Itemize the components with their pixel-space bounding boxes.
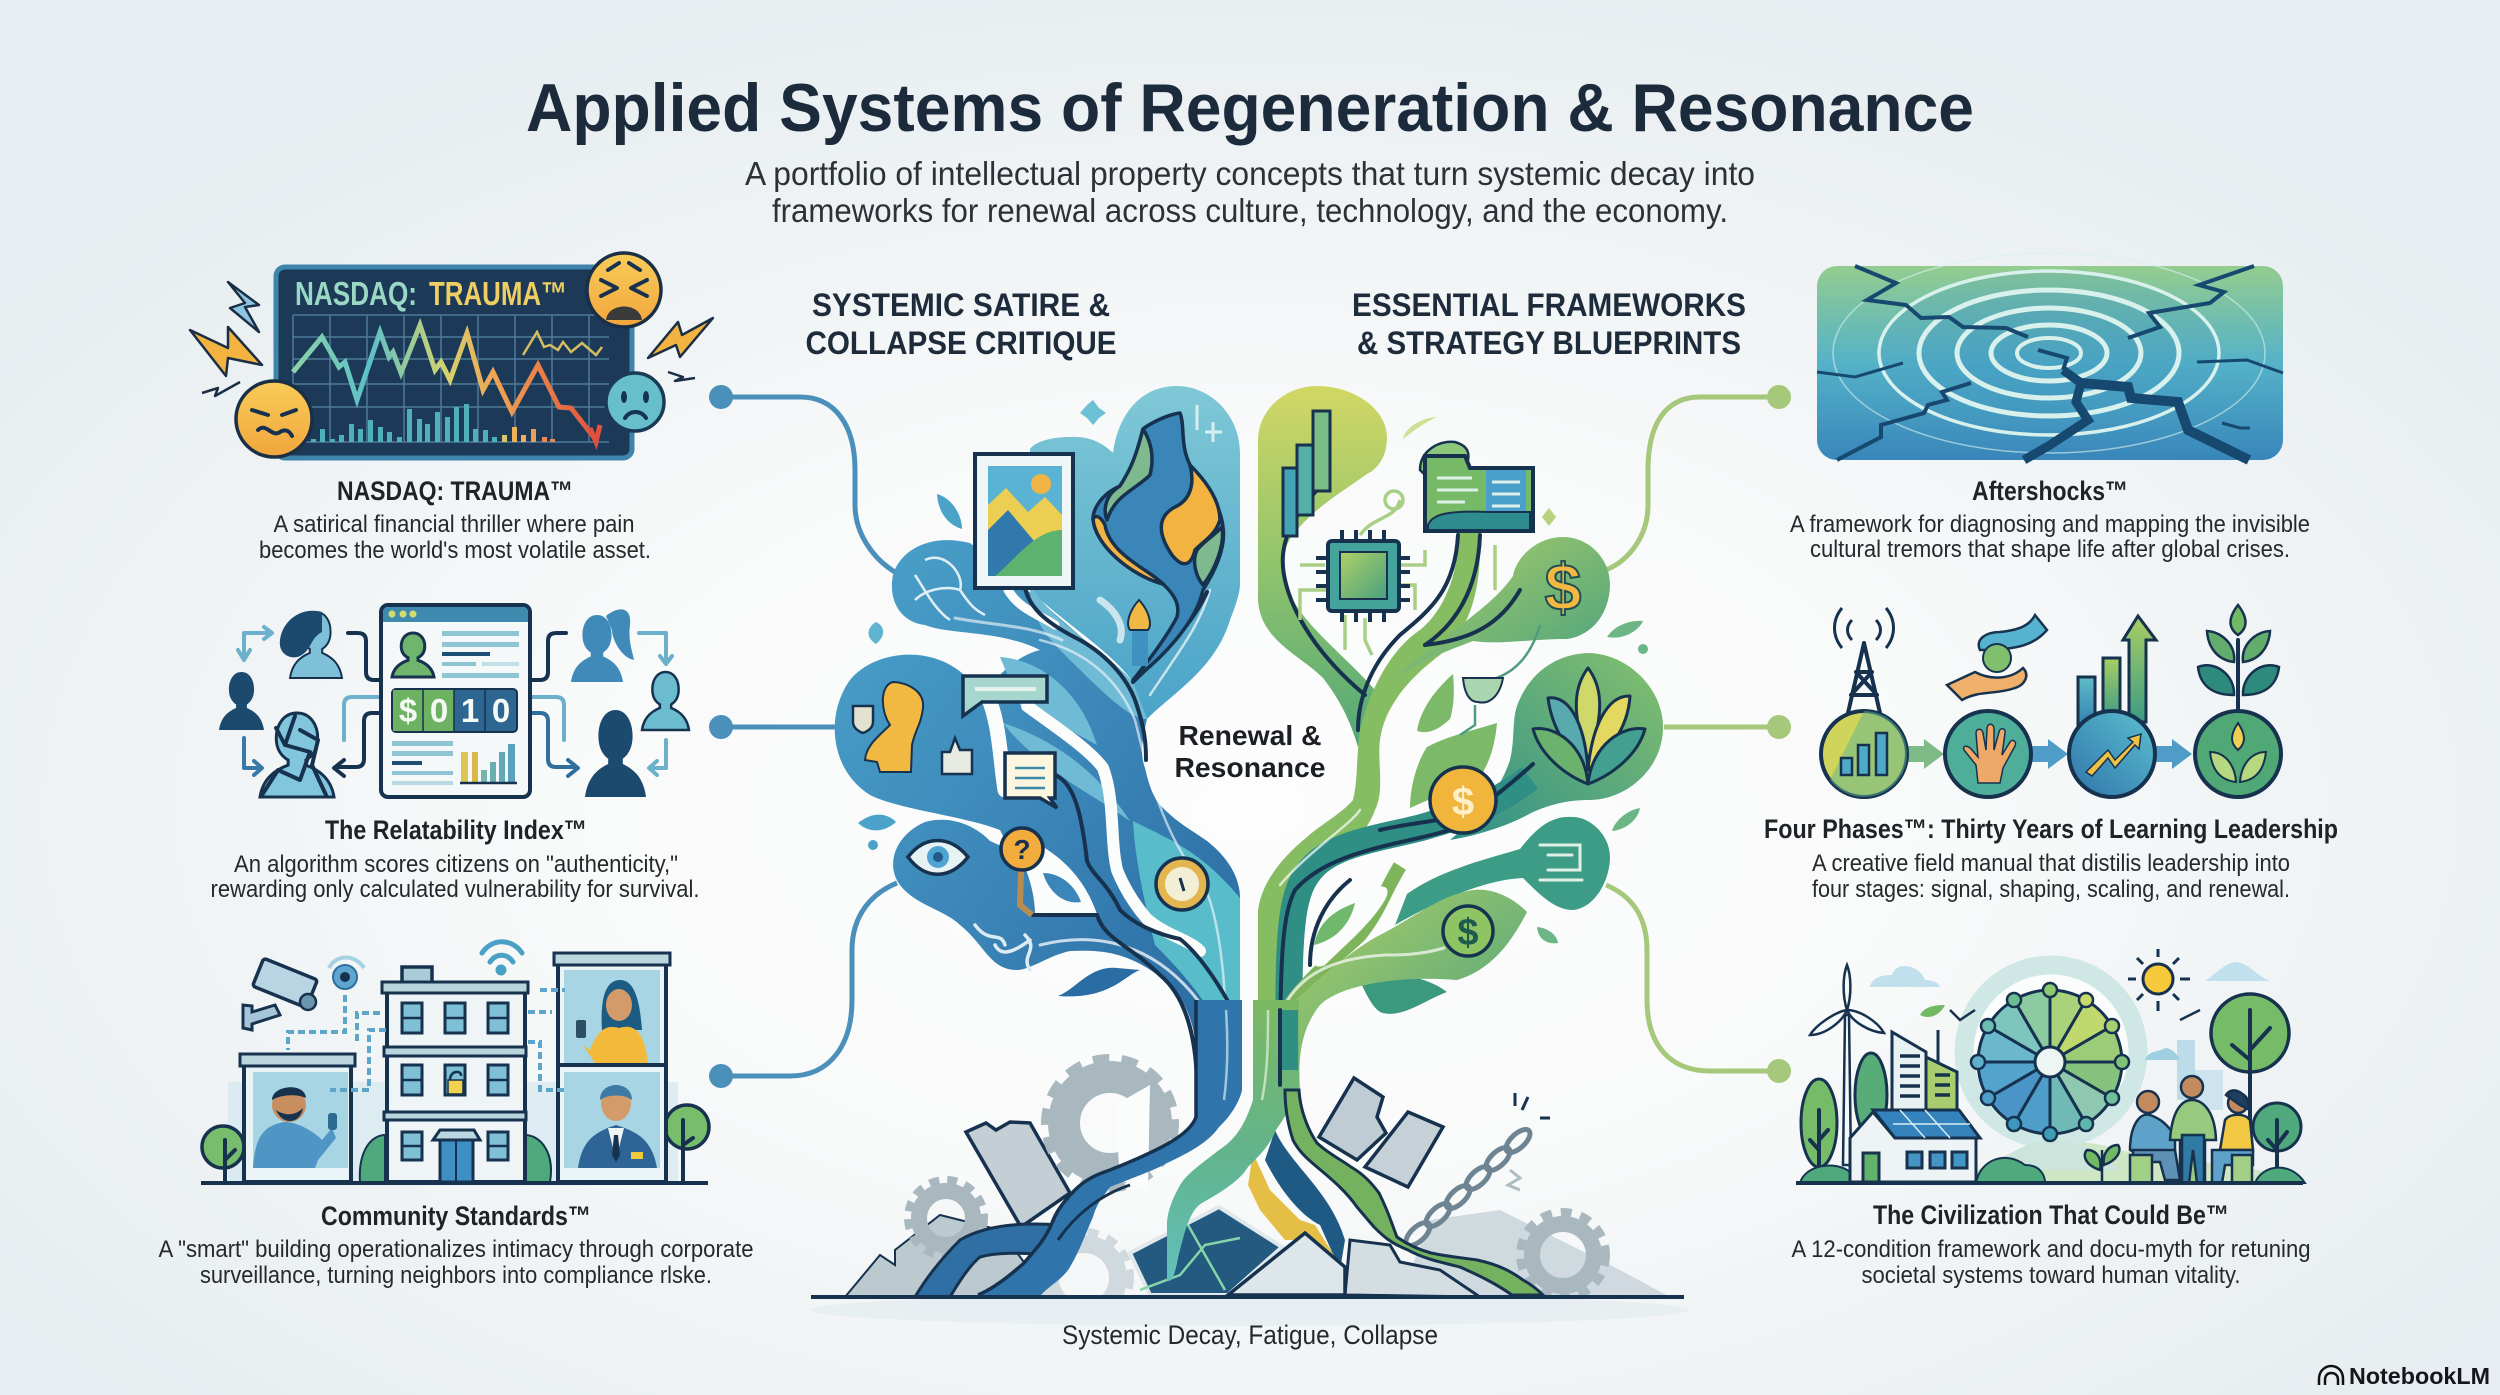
icon: eye	[908, 840, 968, 874]
silhouette: curly woman	[280, 611, 342, 678]
olive link	[1290, 866, 1400, 1005]
gear: right	[1520, 1212, 1606, 1298]
dark coin branch	[1289, 778, 1530, 1020]
ground line	[201, 1181, 708, 1185]
item description	[259, 511, 651, 564]
item description: A "smart" building operationalizes intimacy through corporate	[158, 1236, 754, 1263]
item description: four stages: signal, shaping, scaling, and renewal.	[1812, 876, 2290, 903]
trunk and root: blue main	[978, 1000, 1242, 1295]
ground line: tree	[811, 1295, 1684, 1299]
item description: A 12-condition framework and docu-myth for retuning	[1792, 1236, 2310, 1263]
white gaps	[955, 590, 1226, 1030]
silhouette: right teal person	[642, 672, 689, 730]
icon: wind turbine	[1810, 965, 1884, 1165]
panel: Civilization That Could Be	[1792, 949, 2310, 1289]
branch blob: dollar	[1395, 537, 1610, 680]
icon: sprout	[2085, 1145, 2119, 1183]
illustration: stock board with emojis: TRAUMA™	[429, 275, 567, 312]
icons: clouds and birds	[1870, 962, 2270, 1060]
dark branch outlines	[1025, 588, 1238, 1100]
branch blob: bottom dollar leaf	[1275, 890, 1527, 1090]
subtitle: A portfolio of intellectual property concepts that turn systemic decay into	[745, 155, 1755, 192]
item description	[1790, 511, 2310, 563]
dark branch outlines	[1280, 490, 1533, 1080]
illustration: scoring window and silhouettes: 0	[492, 692, 510, 729]
icon: speech bubble	[963, 676, 1047, 716]
icon: leaf in white gap	[1043, 873, 1081, 902]
background hills, ring and skyline	[1960, 965, 2300, 1183]
gear: bottom	[1041, 1228, 1134, 1295]
center label	[1174, 720, 1326, 783]
heading: essential frameworks	[1352, 287, 1746, 361]
gear: large	[1047, 1060, 1173, 1190]
icon: dollar token: $	[1457, 912, 1479, 954]
icon: angry emoji bottom	[236, 381, 312, 457]
gear: small left	[908, 1180, 984, 1256]
icon: twelve condition wheel	[1971, 983, 2129, 1141]
main blue mass with branch blobs	[835, 540, 1240, 1095]
icon: wifi	[482, 942, 522, 973]
icon: thumbs up	[942, 738, 972, 774]
icon: security camera	[243, 958, 318, 1030]
phase arrows	[1908, 739, 2192, 769]
ground line	[1796, 1181, 2303, 1185]
center trunk dark stem	[1279, 1010, 1298, 1070]
heading: systemic satire: SYSTEMIC SATIRE &	[812, 287, 1110, 323]
silhouette: left man	[219, 672, 264, 730]
item description	[210, 851, 700, 903]
item description: becomes the world's most volatile asset.	[259, 537, 651, 564]
icon: hanging bud	[1463, 678, 1503, 703]
icon: bar chart	[1283, 411, 1330, 536]
item description	[1812, 850, 2290, 903]
icon: brain network	[915, 558, 985, 620]
illustration: stock board with emojis: NASDAQ:	[295, 275, 417, 312]
icon: distressed emoji top	[587, 253, 661, 327]
panel: Aftershocks	[1790, 253, 2310, 563]
illustration: scoring window and silhouettes: 0	[430, 692, 448, 729]
panel: NASDAQ Trauma	[190, 253, 713, 564]
silhouette: polygon head	[260, 713, 334, 797]
trunk highlights	[1268, 810, 1444, 1090]
phase 2: shaping	[1945, 615, 2047, 797]
item description: A satirical financial thriller where pain	[274, 511, 634, 538]
item title: The Civilization That Could Be™	[1873, 1200, 2229, 1230]
bud and circuit lines	[1460, 625, 1540, 735]
icon: document bubble	[1005, 753, 1057, 808]
item description: rewarding only calculated vulnerability for survival.	[210, 876, 700, 903]
item description: A framework for diagnosing and mapping the invisible	[1790, 511, 2310, 538]
item description: surveillance, turning neighbors into compliance rlske.	[200, 1262, 712, 1289]
icon: chip traces	[1300, 491, 1495, 655]
icon: trees right	[2211, 994, 2305, 1183]
phase 4: renewal	[2195, 605, 2281, 797]
branch blob: flame crown	[1030, 386, 1240, 719]
item description: A creative field manual that distilis leadership into	[1812, 850, 2290, 877]
illustration: seismic ripples	[1817, 253, 2283, 460]
item description: societal systems toward human vitality.	[1862, 1262, 2240, 1289]
caption: systemic decay: Systemic Decay, Fatigue, Collapse	[1062, 1320, 1438, 1350]
NotebookLM watermark: NotebookLM	[2349, 1363, 2490, 1389]
people group	[2130, 1076, 2253, 1183]
icon: question pin: ?	[1013, 834, 1031, 865]
icon: sun	[2128, 949, 2190, 1011]
icon: yellow person	[865, 682, 923, 772]
leaves	[858, 400, 1140, 996]
root: dark navy core	[1265, 1130, 1345, 1270]
icon: plant crown	[1533, 668, 1645, 784]
icon: towers	[1892, 1030, 1957, 1112]
branch blob: plant	[1450, 653, 1663, 840]
heading: systemic satire: COLLAPSE CRITIQUE	[806, 325, 1116, 361]
slabs: right broken panels	[1319, 1078, 1386, 1160]
branch blob: bars crown and inner band	[1258, 386, 1387, 747]
building: central tower	[382, 967, 528, 1182]
root: green right	[1285, 1090, 1543, 1295]
title: Applied Systems of Regeneration & Resonance	[526, 70, 1974, 146]
illustration: four phase sequence	[1821, 605, 2281, 797]
illustration: stock board with emojis	[190, 253, 713, 458]
item title: Aftershocks™	[1972, 476, 2128, 506]
item title: NASDAQ: TRAUMA™	[337, 476, 573, 506]
connectors: right	[1606, 385, 1791, 1083]
subtitle: frameworks for renewal across culture, technology, and the economy.	[772, 192, 1728, 229]
item description	[1792, 1236, 2310, 1289]
root: blue secondary	[915, 1224, 1060, 1297]
central stem	[1258, 531, 1480, 1020]
white leaf gap	[1310, 886, 1388, 967]
icon: folder	[1420, 442, 1533, 531]
illustration: scoring window and silhouettes: $	[399, 692, 417, 729]
heading: systemic satire	[806, 287, 1116, 361]
icon: solar house	[1850, 1110, 1980, 1182]
yellow root fragments	[1248, 1153, 1345, 1295]
phase 1: signal	[1821, 608, 1907, 797]
icon: cracked wire marks	[975, 925, 1031, 970]
icon: dollar sign: $	[1545, 550, 1581, 624]
heading: essential frameworks: & STRATEGY BLUEPRINTS	[1357, 325, 1741, 361]
silhouette: ponytail woman	[571, 609, 634, 682]
icon: lightning bolts	[190, 282, 713, 396]
icon: coin	[1430, 767, 1496, 833]
leaves on stem	[1357, 417, 1648, 1014]
silhouette: right man	[585, 710, 646, 797]
icon: small flame	[1128, 600, 1150, 666]
illustration: scoring window and silhouettes	[219, 605, 689, 797]
phase 3: scaling	[2069, 616, 2156, 797]
icon: flame	[1093, 413, 1224, 680]
icon: shield	[853, 706, 873, 733]
center label: Renewal &	[1178, 720, 1322, 751]
icon: sad blue emoji	[606, 373, 664, 431]
icon: coin: $	[1452, 780, 1474, 824]
slab: left broken pillar	[966, 1122, 1070, 1227]
connectors: left	[709, 385, 897, 1088]
panel: Relatability Index	[210, 605, 700, 903]
item title: Four Phases™: Thirty Years of Learning Leadership	[1764, 814, 2338, 844]
building: right flats	[554, 953, 670, 1182]
illustration: scoring window and silhouettes: 1	[461, 692, 479, 729]
central tree: right half	[1258, 386, 1663, 1090]
icon: trees left	[1800, 1053, 1887, 1183]
item title: Community Standards™	[321, 1201, 591, 1231]
trunk and root: green to teal	[1167, 1000, 1299, 1281]
item description: An algorithm scores citizens on "authenticity,"	[234, 851, 678, 878]
surveillance data lines	[288, 990, 565, 1090]
central tree: left half	[835, 386, 1240, 1100]
sparkles	[1197, 405, 1222, 442]
panel: Community Standards	[158, 942, 754, 1289]
icon: broken chain	[1402, 1093, 1550, 1249]
item description	[158, 1236, 754, 1289]
icon: question pin	[1001, 828, 1043, 915]
icon: trees and bushes	[202, 1105, 709, 1183]
building: left flat	[240, 1054, 355, 1182]
white rubble	[1228, 1233, 1345, 1295]
icon: circuit glyph	[1540, 845, 1582, 880]
debris: broken systems	[810, 1000, 1690, 1326]
item title: The Relatability Index™	[325, 815, 587, 845]
subtitle	[745, 155, 1755, 229]
illustration: regenerative town	[1800, 949, 2305, 1183]
panel: Four Phases	[1764, 605, 2338, 903]
icon: dollar token	[1443, 906, 1493, 956]
icon: picture frame	[975, 454, 1073, 588]
icon: clock coin	[1156, 858, 1208, 910]
branch blob: circuit	[1395, 817, 1610, 925]
icon: microchip	[1316, 530, 1410, 622]
center label: Resonance	[1174, 752, 1326, 783]
navy panel with growth arrow	[1130, 1207, 1282, 1295]
icon: eye sensor	[329, 958, 364, 989]
item description: cultural tremors that shape life after global crises.	[1810, 536, 2290, 563]
heading: essential frameworks: ESSENTIAL FRAMEWORKS	[1352, 287, 1746, 323]
illustration: smart building	[202, 942, 709, 1183]
light teal sweeps	[1000, 585, 1240, 1095]
